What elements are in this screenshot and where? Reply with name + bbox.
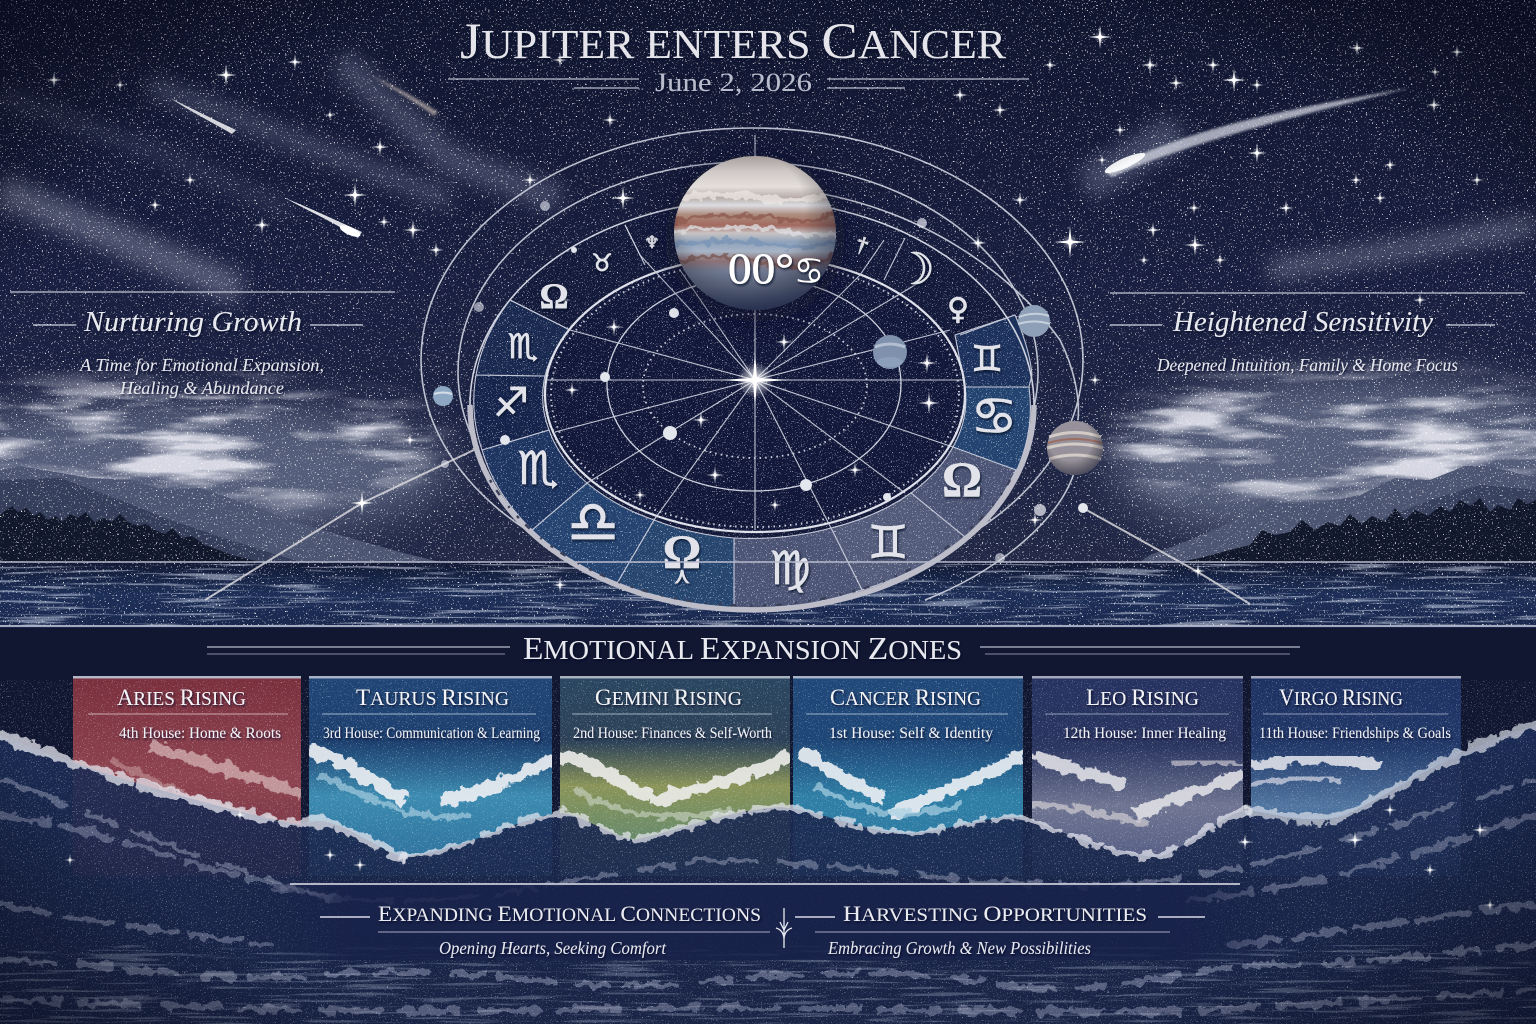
card: Leo Rising (1032, 676, 1243, 876)
zodiac glyphs: ♊ (867, 515, 909, 569)
wheel spokes (545, 135, 965, 530)
degree label: ♋ (794, 249, 824, 293)
left description (79, 355, 324, 398)
small planet: left (433, 386, 453, 406)
bottom heading right: HARVESTING OPPORTUNITIES (843, 901, 1147, 926)
constellation rays outside wheel (205, 448, 1250, 604)
left callout (10, 292, 395, 398)
right description: Deepened Intuition, Family & Home Focus (1156, 355, 1458, 375)
card: Gemini Rising (560, 676, 790, 876)
star dust (0, 0, 1536, 625)
degree label: 00° (728, 246, 794, 293)
title (460, 14, 1007, 97)
zodiac glyphs: Ω (942, 451, 982, 507)
comet left (170, 75, 438, 239)
card: Virgo Rising: 11th House: Friendships & Goals (1259, 725, 1451, 742)
sparkle stars (46, 25, 1484, 447)
bottom caption panel (250, 884, 1280, 960)
left description: A Time for Emotional Expansion, (79, 355, 324, 375)
card: Taurus Rising: TAURUS RISING (356, 685, 509, 711)
bottom heading left: EXPANDING EMOTIONAL CONNECTIONS (378, 901, 761, 926)
card: Leo Rising: LEO RISING (1086, 685, 1199, 711)
zodiac glyphs: ♆ (644, 233, 660, 253)
sea sparkle stars (64, 803, 1496, 911)
card: Cancer Rising (793, 676, 1023, 876)
card: Gemini Rising: GEMINI RISING (595, 685, 742, 711)
lower sea streaks (0, 945, 1536, 1024)
wheel star dust (470, 200, 1035, 610)
zodiac glyphs: ♎ (567, 488, 619, 556)
mountains right (1140, 466, 1536, 562)
icon: divider arrow lily (776, 908, 792, 948)
zodiac glyphs: ⋏ (674, 564, 690, 589)
painted clouds right (1102, 360, 1536, 502)
background: night sky (0, 0, 1536, 570)
sea swell lines (0, 780, 1536, 1011)
zodiac glyphs: ♏ (517, 441, 559, 495)
bottom description right: Embracing Growth & New Possibilities (827, 938, 1091, 958)
foreground sea (0, 725, 1536, 1024)
zodiac glyphs (493, 231, 1017, 595)
painted clouds left (0, 370, 456, 518)
lower band base (0, 628, 1536, 1024)
small planet: inner right (873, 335, 907, 369)
title rules (448, 79, 1029, 88)
right heading: Heightened Sensitivity (1172, 307, 1434, 338)
card: Aries Rising: 4th House: Home & Roots (119, 725, 281, 742)
section rules (0, 562, 1536, 654)
card: Virgo Rising (1251, 676, 1461, 840)
lake water (0, 562, 1536, 628)
wheel center disk (545, 256, 965, 532)
inner circles (607, 277, 901, 491)
ray glints (350, 491, 1206, 579)
card: Cancer Rising: CANCER RISING (830, 685, 981, 711)
title: JUPITER ENTERS CANCER (460, 14, 1007, 70)
zodiac glyphs: Ω (663, 526, 701, 579)
bottom band: emotional connections (320, 901, 770, 958)
card: Taurus Rising: 3rd House: Communication & Learning (323, 725, 540, 742)
bottom description left: Opening Hearts, Seeking Comfort (439, 938, 667, 958)
Jupiter (665, 154, 845, 322)
zodiac glyphs: † (853, 231, 872, 258)
date: June 2, 2026 (655, 68, 812, 97)
wave foam crests (0, 725, 1536, 857)
card: Aries Rising (73, 676, 301, 855)
card: Cancer Rising: 1st House: Self & Identity (829, 725, 993, 742)
sea star specks (0, 680, 1536, 1024)
wheel body (470, 200, 1034, 610)
card: Gemini Rising: 2nd House: Finances & Self-Worth (573, 725, 772, 742)
wheel sign segments (474, 225, 1032, 609)
zodiac glyphs: ♉ (591, 249, 613, 277)
rim inscription ticks (490, 480, 1010, 606)
wheel top rim (470, 200, 1034, 405)
comet right (1103, 88, 1410, 177)
card: Aries Rising: ARIES RISING (117, 685, 246, 711)
zodiac glyphs: ♏ (508, 327, 538, 367)
zodiac wheel (441, 135, 1088, 610)
small planet: striped right (1047, 421, 1103, 475)
zodiac glyphs: ☽ (895, 244, 935, 295)
zodiac glyphs: ♐ (493, 380, 529, 426)
nebula and cloud glow (0, 60, 1536, 545)
outer orbits (421, 128, 1083, 600)
zodiac glyphs: Ω (540, 276, 568, 316)
left description: Healing & Abundance (119, 378, 284, 398)
card: Virgo Rising: VIRGO RISING (1279, 685, 1403, 711)
left heading: Nurturing Growth (83, 307, 302, 338)
water streaks (0, 564, 1536, 626)
zodiac glyphs: ♋ (971, 387, 1017, 447)
mountains left (0, 466, 440, 562)
zodiac glyphs: ♍ (769, 541, 811, 595)
right callout (1110, 293, 1525, 375)
small planet: upper right (1018, 305, 1050, 337)
degree label (728, 246, 824, 293)
bottom band: harvesting opportunities (795, 901, 1205, 958)
zodiac glyphs: ♊ (971, 339, 1003, 380)
section heading: EMOTIONAL EXPANSION ZONES (523, 630, 962, 666)
wheel sparkle stars (552, 186, 1043, 593)
card: Taurus Rising (309, 676, 552, 876)
wheel lower rim (470, 405, 1034, 610)
bottom panel top rule (290, 883, 1240, 885)
zodiac glyphs: ♀ (947, 292, 969, 327)
card: Leo Rising: 12th House: Inner Healing (1063, 725, 1226, 742)
constellation nodes (441, 201, 1088, 563)
center starburst (720, 352, 790, 408)
